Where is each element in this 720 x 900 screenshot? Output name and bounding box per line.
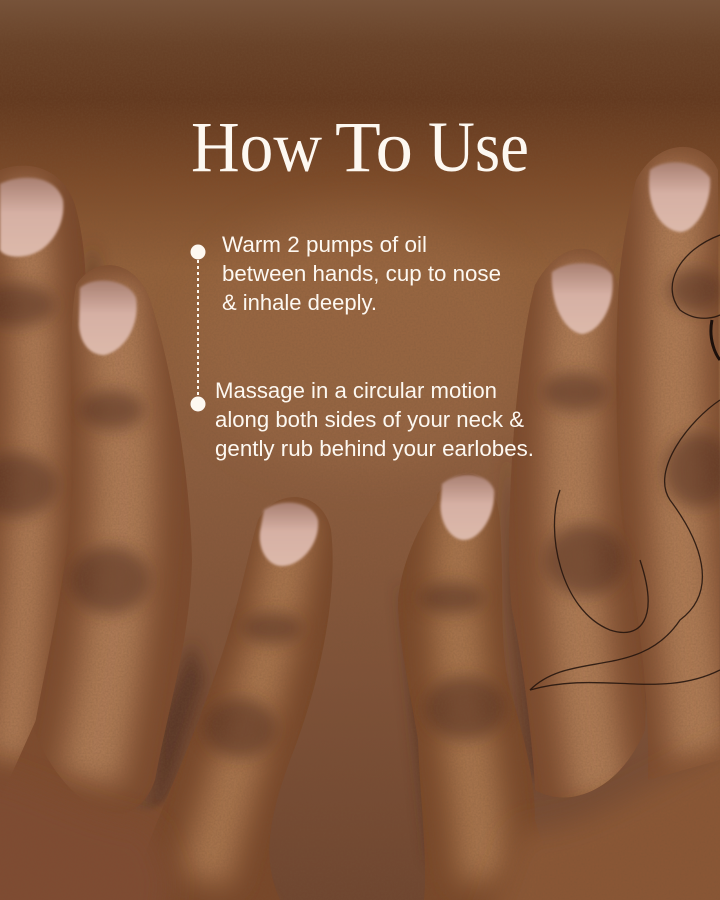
- title: [191, 107, 529, 187]
- timeline: dots and dotted connector: [190, 244, 206, 412]
- step 2 text: gently rub behind your earlobes.: [215, 436, 534, 461]
- title: Use: [428, 107, 529, 187]
- step 1 text: & inhale deeply.: [222, 290, 377, 315]
- title: How: [191, 107, 322, 187]
- step 1 text: [222, 232, 501, 315]
- step 2 text: [215, 378, 534, 461]
- step 1 text: Warm 2 pumps of oil: [222, 232, 427, 257]
- lower left palm blend: [0, 770, 172, 900]
- finger 5: [510, 260, 646, 798]
- step 1 text: between hands, cup to nose: [222, 261, 501, 286]
- lower right palm blend: [480, 730, 720, 900]
- step 2 text: along both sides of your neck &: [215, 407, 524, 432]
- finger 2: [36, 265, 192, 802]
- finger 3: [168, 497, 332, 889]
- shadows between fingers: [20, 240, 655, 860]
- finger 4: [398, 474, 534, 900]
- title: To: [335, 107, 413, 187]
- lower left hand: [0, 680, 280, 900]
- knuckle creases: [0, 268, 720, 758]
- finger 6: [616, 147, 720, 768]
- finger 1: [0, 166, 86, 768]
- nails: [0, 162, 710, 566]
- step 2 text: Massage in a circular motion: [215, 378, 497, 403]
- stray hairs: [530, 235, 720, 690]
